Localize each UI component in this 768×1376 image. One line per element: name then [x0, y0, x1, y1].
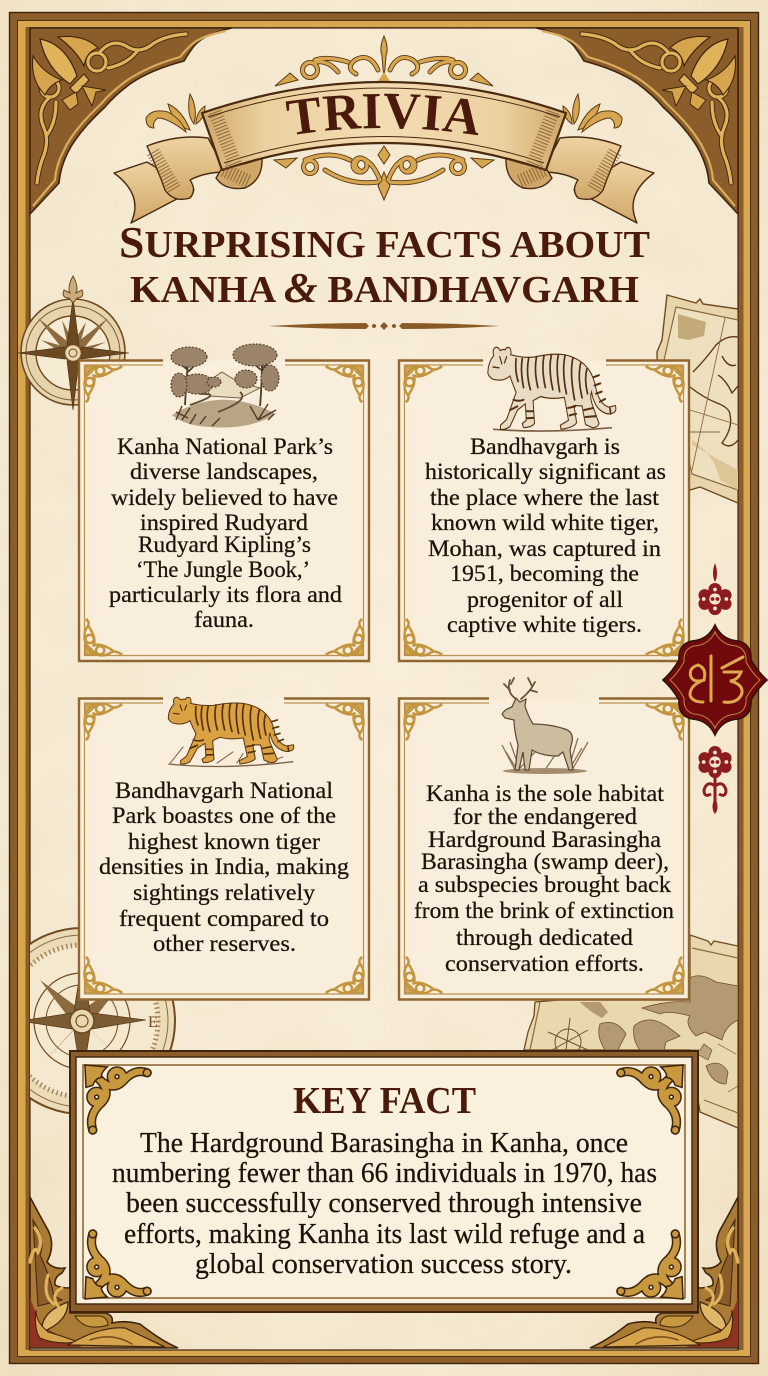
text block	[112, 1128, 657, 1280]
heading: key fact: KEY FACT	[293, 1080, 476, 1122]
corner ornaments	[405, 365, 683, 656]
icon: jungle landscape sketch	[171, 344, 279, 427]
text block: been successfully conserved through intensive	[126, 1188, 642, 1219]
banner ornament: lower flourish	[274, 146, 494, 200]
icon: red flower lower	[698, 746, 732, 814]
panel: Kanha swamp deer	[399, 678, 689, 1000]
text block: other reserves.	[153, 931, 296, 956]
text block: captive white tigers.	[447, 612, 642, 637]
text block: densities in India, making	[99, 854, 350, 879]
text block: inspired Rudyard	[140, 510, 309, 535]
text block: the place where the last	[430, 485, 660, 510]
text block	[425, 434, 666, 637]
text block: widely believed to have	[111, 485, 338, 510]
frame corner: bottom right scrollwork	[590, 1197, 738, 1348]
antique map: lower right	[524, 935, 738, 1128]
text block: fauna.	[194, 607, 254, 632]
text block: a subspecies brought back	[418, 872, 672, 897]
text block: from the brink of extinction	[414, 898, 675, 923]
text block: frequent compared to	[119, 906, 329, 931]
icon: white tiger	[488, 347, 616, 431]
text block: particularly its flora and	[109, 582, 343, 607]
antique map: upper right	[657, 295, 738, 503]
text block: known wild white tiger,	[431, 510, 659, 535]
text block: ‘The Jungle Book,’	[136, 557, 310, 582]
title: TRIVIA: TRIVIA	[286, 94, 478, 136]
text block: Hardground Barasingha	[428, 827, 661, 852]
text block: Park boastεs one of the	[112, 803, 336, 828]
corner ornaments	[85, 365, 363, 656]
text block: sightings relatively	[133, 880, 316, 905]
text block: Rudyard Kipling’s	[138, 532, 311, 557]
text block: numbering fewer than 66 individuals in 1970, has	[112, 1158, 657, 1189]
text block: historically significant as	[425, 459, 666, 484]
frame corner: top left fleur-de-lis	[30, 28, 232, 214]
panel: Bandhavgarh white tiger	[399, 347, 689, 661]
text block	[109, 434, 343, 632]
panel: Bandhavgarh tiger density	[79, 697, 369, 1000]
text block: global conservation success story.	[195, 1249, 572, 1280]
compass rose: upper left	[18, 276, 129, 410]
panel: key fact	[69, 1050, 699, 1313]
text block: Kanha is the sole habitat	[426, 781, 665, 806]
banner ornament: side sprigs	[146, 94, 622, 132]
text block: Barasingha (swamp deer),	[421, 849, 669, 874]
divider ornament	[268, 322, 500, 330]
corner ornaments	[85, 703, 363, 994]
key fact corner ornaments	[85, 1065, 683, 1299]
compass rose: lower left	[30, 927, 176, 1114]
text block: progenitor of all	[467, 587, 623, 612]
text block: Mohan, was captured in	[428, 536, 662, 561]
text block: Kanha National Park’s	[117, 434, 333, 459]
text block	[99, 778, 350, 956]
heading: surprising facts: KANHA & BANDHAVGARH	[130, 266, 639, 312]
text block	[414, 781, 675, 976]
heading: surprising facts: SURPRISING FACTS ABOUT	[119, 218, 650, 267]
frame corner: bottom left scrollwork	[30, 1197, 178, 1348]
icon: red flower upper	[698, 563, 732, 615]
text block: for the endangered	[453, 804, 638, 829]
frame corner: top right fleur-de-lis	[536, 28, 738, 214]
banner ornament: top flourish	[275, 36, 493, 86]
corner ornaments	[405, 703, 683, 994]
text block: efforts, making Kanha its last wild refuge and a	[124, 1219, 646, 1250]
text block: highest known tiger	[128, 829, 320, 854]
text block: diverse landscapes,	[130, 459, 318, 484]
icon: crimson emblem seal	[663, 625, 767, 735]
icon: orange tiger	[168, 697, 294, 767]
panel: Kanha landscapes	[79, 344, 369, 661]
heading: surprising facts	[119, 218, 650, 312]
text block: Bandhavgarh is	[470, 434, 620, 459]
title ribbon banner	[114, 82, 654, 223]
text block: 1951, becoming the	[450, 561, 639, 586]
icon: barasingha deer	[502, 678, 588, 774]
text block: conservation efforts.	[445, 951, 644, 976]
text block: through dedicated	[456, 925, 634, 950]
compass rose: lower left: E	[148, 1014, 158, 1031]
text block: The Hardground Barasingha in Kanha, once	[140, 1128, 628, 1159]
text block: Bandhavgarh National	[115, 778, 333, 803]
